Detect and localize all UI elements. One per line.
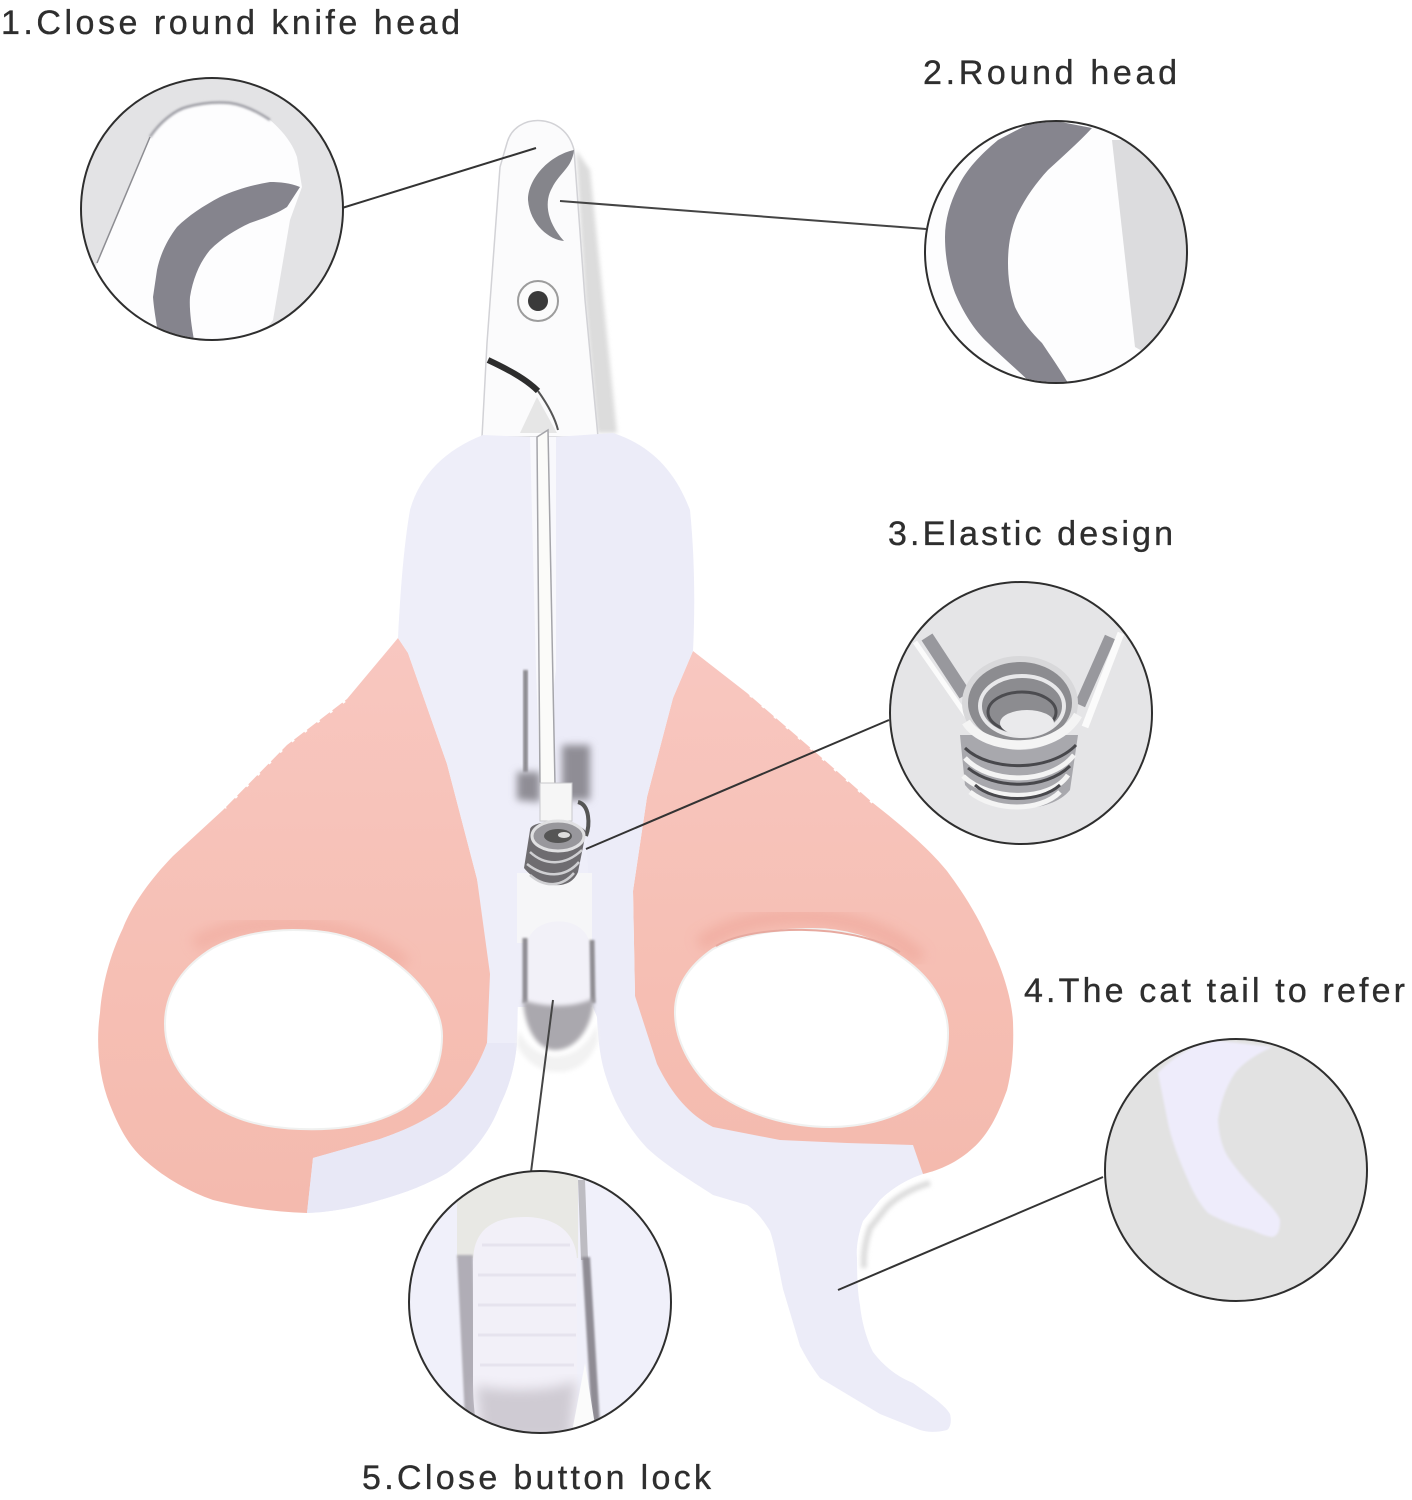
blade crescent notch — [528, 150, 574, 241]
lock button — [473, 1217, 577, 1416]
detail circle 5: close button lock — [408, 1170, 672, 1440]
right hole rim — [716, 930, 900, 952]
right groove upper — [578, 1180, 588, 1260]
leader line 4 — [838, 1177, 1103, 1290]
leader line 2 — [560, 201, 926, 229]
pale panel below coil — [517, 873, 592, 943]
label 1: 1.Close round knife head — [1, 4, 460, 42]
grip serration left — [225, 701, 345, 808]
button base shadow — [476, 1380, 576, 1440]
detail circle 3: elastic design spring — [880, 581, 1153, 850]
right handle pink grip — [633, 651, 1013, 1174]
white blade area — [90, 102, 302, 350]
dark blade edge — [150, 102, 270, 137]
left handle pink grip — [98, 638, 505, 1213]
right handle white body and cat tail — [555, 433, 951, 1432]
lock side shadows — [525, 938, 593, 1003]
channel dark edge left — [523, 670, 528, 772]
left handle white body — [307, 435, 530, 1213]
label 3: 3.Elastic design — [888, 515, 1173, 553]
steel wedge — [520, 397, 557, 433]
left hole shade — [195, 925, 405, 965]
leader line 5 — [531, 1000, 553, 1172]
left finger hole — [165, 930, 442, 1129]
blade shadow — [576, 150, 617, 433]
white tail — [1158, 1040, 1280, 1237]
leader line 3 — [586, 720, 889, 849]
leader line 1 — [342, 148, 536, 208]
detail circle 1: close round knife head — [80, 78, 344, 350]
tail shadow — [864, 1183, 930, 1268]
grey side strip — [1112, 140, 1186, 350]
left groove — [456, 1254, 475, 1414]
grey crescent band — [945, 118, 1092, 390]
steel blades — [482, 121, 598, 437]
spring coil — [524, 821, 586, 885]
pale wire strip — [530, 437, 556, 785]
pale rim under button — [517, 1024, 598, 1072]
label 5: 5.Close button lock — [362, 1459, 712, 1497]
blade gap — [488, 360, 538, 391]
button ribs — [478, 1245, 576, 1365]
right hole shade — [700, 917, 920, 960]
coil — [960, 735, 1078, 808]
pivot screw — [518, 281, 558, 321]
spring block — [540, 783, 572, 821]
grey crescent — [153, 182, 300, 345]
steel spring wire — [537, 430, 555, 785]
top pale area — [457, 1170, 578, 1258]
label 2: 2.Round head — [923, 54, 1177, 92]
spring loop — [578, 802, 588, 836]
left handle lower tint — [307, 1043, 517, 1213]
right groove lower — [582, 1257, 600, 1425]
grip serration right — [750, 695, 873, 803]
thin diagonal edge — [97, 137, 150, 263]
right finger hole — [675, 929, 948, 1127]
lock button shadow — [523, 998, 594, 1050]
label 4: 4.The cat tail to refer — [1024, 972, 1405, 1010]
spring arms — [927, 637, 965, 695]
blade gap thin — [538, 391, 558, 430]
center backing — [517, 437, 592, 1007]
pink corner — [880, 803, 925, 850]
detail circle 4: cat tail — [1104, 1038, 1368, 1302]
gap wedge — [573, 1365, 594, 1428]
detail circle 2: round head — [925, 118, 1195, 390]
product: pet nail scissors — [98, 121, 1013, 1432]
spring shadow block — [517, 745, 590, 802]
lock button — [527, 921, 590, 1010]
